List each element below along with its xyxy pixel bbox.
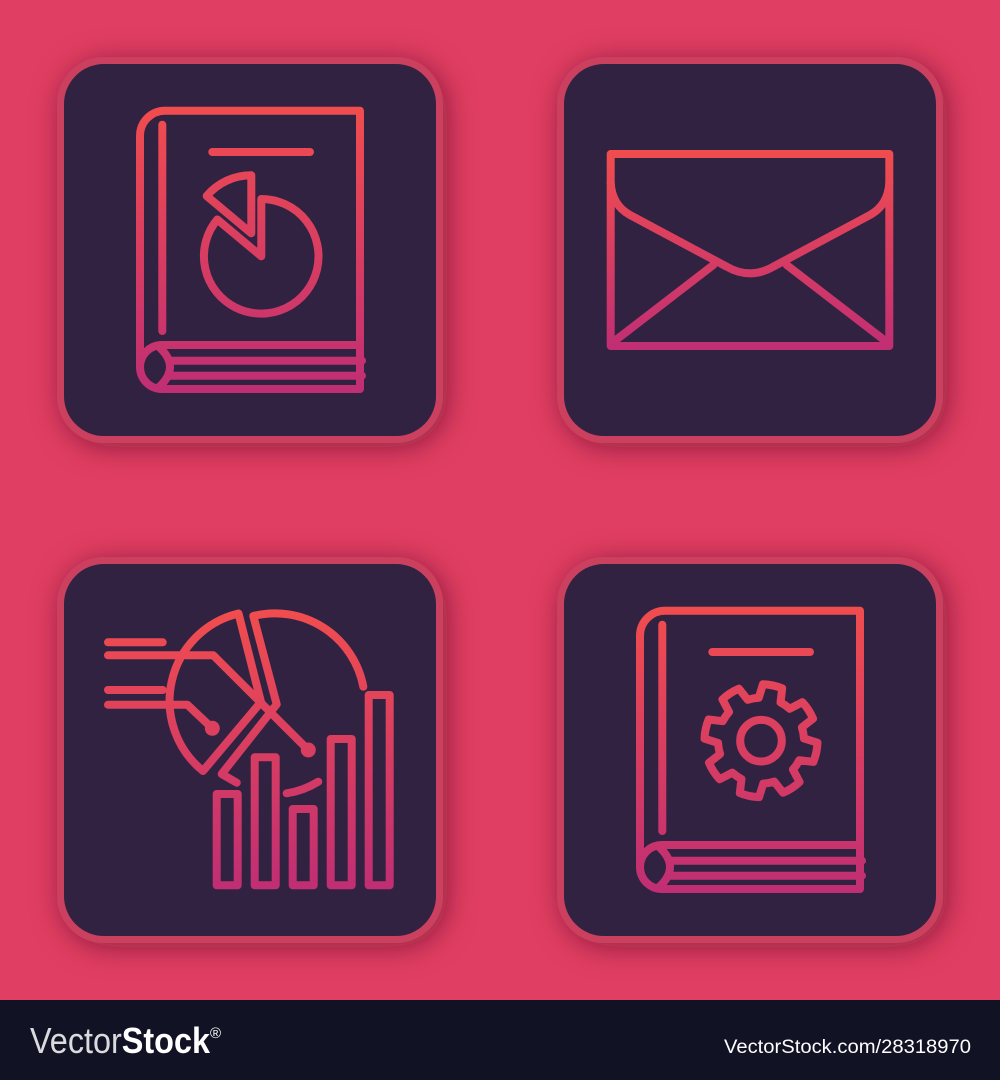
panel: book with pie chart [60, 60, 440, 440]
icon: gear [705, 684, 817, 797]
icon: pie and bar chart [108, 613, 390, 885]
icon: book with gear [640, 611, 862, 889]
panel: pie and bar chart [60, 560, 440, 940]
logo text: VectorStock [30, 1020, 211, 1061]
panel: book with gear [560, 560, 940, 940]
icon: book with pie chart [140, 111, 362, 389]
icon: envelope [611, 154, 889, 346]
image id text: VectorStock.com/28318970 [724, 1036, 971, 1058]
footer bar [0, 1000, 1000, 1080]
registered mark: ® [210, 1025, 221, 1042]
panel: envelope [560, 60, 940, 440]
